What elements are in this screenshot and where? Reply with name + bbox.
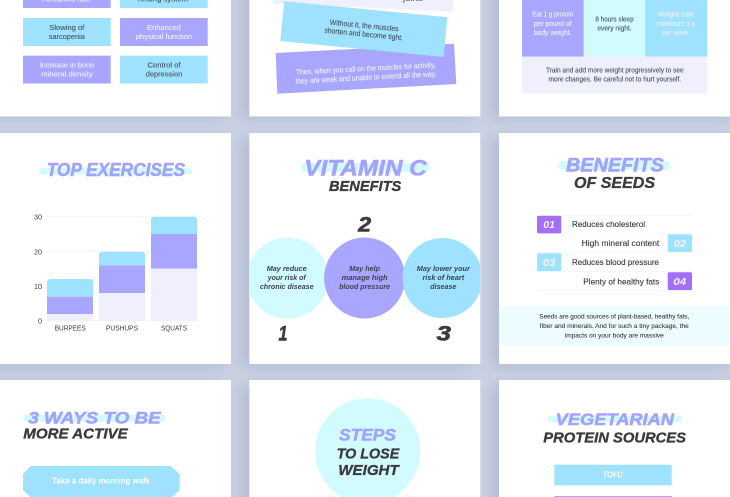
circle 1: chronic disease (247, 237, 328, 319)
title circle (315, 398, 420, 497)
item 03: reduces blood pressure: Reduces blood pressure (572, 258, 660, 267)
circle 2: blood pressure: manage high (342, 273, 388, 282)
item 02: high mineral content: 02 (674, 239, 687, 250)
title circle: WEIGHT (338, 462, 401, 479)
tile: control of depression (120, 56, 208, 84)
stacked bar chart: 10 (34, 282, 42, 291)
column: sleep: every night. (597, 23, 632, 32)
circle 3: heart disease: May lower your (417, 264, 471, 273)
tile: enhanced physical function: physical function (136, 32, 192, 41)
panel: top exercises (0, 133, 231, 364)
item: tofu (554, 465, 672, 485)
bar: pushups: PUSHUPS (106, 324, 138, 332)
note: train progressively (522, 57, 707, 93)
circle 3: heart disease: risk of heart (422, 273, 465, 282)
heading: vitamin c: VITAMIN C (304, 156, 428, 181)
bar: burpees: BURPEES (55, 324, 86, 332)
column: weight training: Weight train (658, 10, 694, 19)
connector lines (328, 493, 409, 497)
panel: vitamin c benefits (247, 133, 482, 364)
subheading: benefits: BENEFITS (329, 178, 401, 195)
stacked bar chart (34, 212, 197, 332)
tile: slowing of sarcopenia: Slowing of (49, 23, 85, 32)
card: purple muscles weak: they are weak and unable to extend all the way. (295, 69, 437, 86)
button: daily morning walk (23, 466, 180, 497)
bar: squats (151, 217, 197, 332)
note: train progressively: Train and add more weight progressively to see (546, 66, 684, 75)
heading: 3 ways to be: 3 WAYS TO BE (28, 409, 161, 428)
panel: 3 ways to be more active (0, 380, 231, 497)
tile: slowing of sarcopenia: sarcopenia (49, 32, 86, 41)
column: weight training (645, 0, 707, 57)
number 1: 1 (278, 323, 288, 346)
card: lavender stretching note (273, 0, 453, 12)
card: blue muscles tight: Without it, the muscles (329, 18, 399, 33)
bar: pushups (99, 252, 145, 332)
bar: burpees (47, 279, 93, 332)
item 01: reduces cholesterol: Reduces cholesterol (572, 220, 645, 229)
note: seeds summary: Seeds are good sources of plant-based, healthy fats, (539, 314, 689, 321)
column: sleep: 8 hours sleep (595, 14, 634, 23)
circle 2: blood pressure (324, 238, 405, 318)
stacked bar chart: 20 (34, 248, 42, 256)
note: train progressively: more changes. Be careful not to hurt yourself. (548, 75, 681, 84)
tile: enhanced physical function (120, 18, 208, 46)
panel: muscle building tips (499, 0, 730, 116)
panel: benefits of seeds (499, 133, 730, 364)
circle 2: blood pressure: May help (349, 264, 380, 273)
note: seeds summary (499, 306, 730, 346)
item: tofu: TOFU (603, 471, 623, 480)
circle 1: chronic disease: chronic disease (260, 282, 314, 291)
item 04: plenty of healthy fats: 04 (673, 277, 687, 288)
tile: increase in bone mineral density: Increase in bone (40, 61, 94, 70)
column: protein: body weight. (534, 28, 572, 37)
tile: control of depression: Control of (148, 61, 181, 70)
column: weight training: per week. (662, 28, 690, 37)
note: seeds summary: impacts on your body are massive (565, 332, 664, 339)
tile: control of depression: depression (146, 70, 182, 79)
column: sleep (584, 0, 645, 57)
number 2: 2 (357, 214, 372, 237)
button: daily morning walk: Take a daily morning walk (52, 476, 150, 485)
heading: top exercises: TOP EXERCISES (47, 160, 185, 180)
card: blue muscles tight (280, 1, 447, 57)
item 02: high mineral content (582, 234, 692, 252)
item 04: plenty of healthy fats (583, 272, 692, 290)
tile: metabolic rate (23, 0, 111, 8)
title circle: STEPS (339, 426, 397, 445)
panel: benefits of exercise grid (0, 0, 231, 116)
tile: increase in bone mineral density (23, 56, 111, 84)
column: protein (522, 0, 584, 57)
subheading: protein sources: PROTEIN SOURCES (543, 430, 686, 446)
subheading: of seeds: OF SEEDS (574, 175, 655, 192)
item 03: reduces blood pressure (537, 253, 660, 271)
circle 2: blood pressure: blood pressure (339, 282, 391, 291)
column: weight training: minimum 3 x (657, 19, 695, 28)
circle 3: heart disease: disease (430, 282, 457, 291)
title circle: TO LOSE (337, 445, 400, 462)
panel: steps to lose weight (249, 380, 480, 497)
card: blue muscles tight: shorten and become tight. (324, 26, 403, 42)
number 3: 3 (436, 323, 451, 346)
note: seeds summary: fiber and minerals. And for such a tiny package, the (540, 323, 689, 330)
item: next source (554, 496, 672, 497)
item 04: plenty of healthy fats: Plenty of healthy fats (583, 278, 659, 287)
circle 3: heart disease (402, 238, 482, 318)
item 03: reduces blood pressure: 03 (543, 258, 556, 269)
card: purple muscles weak: Then, when you call on the muscles for activity, (296, 60, 436, 77)
item 02: high mineral content: High mineral content (582, 239, 660, 248)
stacked bar chart: 30 (34, 212, 42, 222)
subheading: more active: MORE ACTIVE (23, 426, 129, 443)
card: purple muscles weak (276, 44, 456, 94)
bar: squats: SQUATS (161, 324, 187, 332)
tile: increase in bone mineral density: mineral density (41, 70, 93, 79)
tile: slowing of sarcopenia (23, 18, 111, 46)
tile: enhanced physical function: Enhanced (147, 23, 181, 32)
heading: vegetarian: VEGETARIAN (556, 410, 675, 429)
panel: vegetarian protein sources (499, 380, 730, 497)
circle 1: chronic disease: your risk of (267, 273, 307, 282)
item 01: reduces cholesterol (537, 216, 645, 233)
heading: benefits: BENEFITS (566, 156, 664, 177)
stacked bar chart: 0 (38, 316, 42, 326)
column: protein: Eat 1 g protein (532, 10, 573, 19)
tile: resting system (120, 0, 208, 8)
item 01: reduces cholesterol: 01 (543, 220, 555, 231)
circle 1: chronic disease: May reduce (267, 264, 307, 273)
panel: stretching cards (249, 0, 480, 116)
column: protein: per pound of (534, 19, 572, 28)
